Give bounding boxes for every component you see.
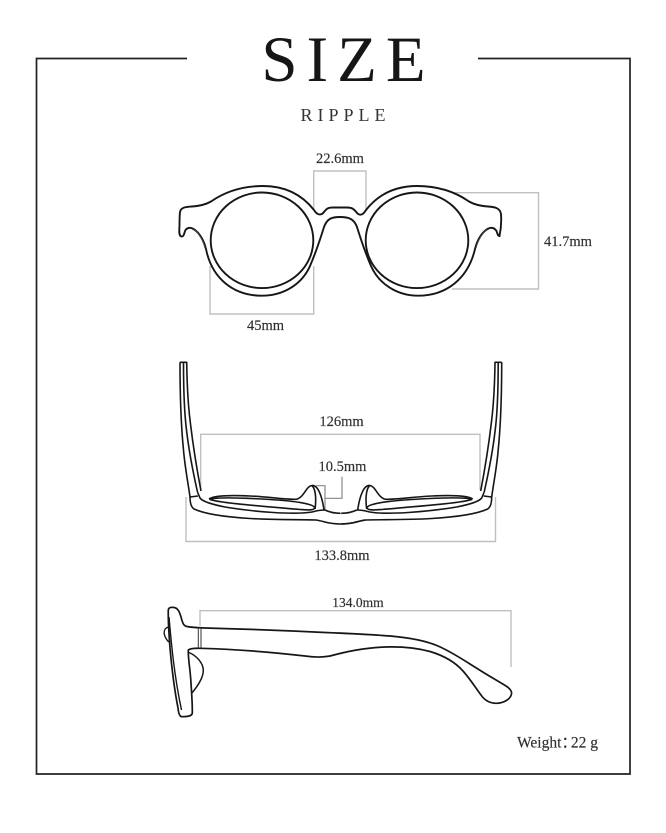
label: hinge width: 126mm bbox=[319, 414, 364, 430]
dimension lines: front view bbox=[210, 171, 538, 314]
far side nose pad bbox=[164, 627, 169, 642]
front view of glasses bbox=[179, 171, 539, 314]
subtitle: model name: RIPPLE bbox=[300, 105, 391, 125]
left half of top view bbox=[180, 362, 365, 524]
front frame outline bbox=[179, 186, 501, 296]
left lens bbox=[211, 192, 313, 288]
dimension lines: side view bbox=[200, 611, 511, 667]
side view of glasses bbox=[164, 607, 512, 717]
right lens bbox=[366, 192, 468, 288]
temple and front outline bbox=[168, 607, 512, 717]
label: lens width: 45mm bbox=[247, 318, 285, 334]
top view of glasses bbox=[180, 362, 502, 542]
lens edge line bbox=[169, 617, 182, 710]
label: nose pad width: 10.5mm bbox=[319, 459, 367, 475]
label: weight: Weight：22 g bbox=[517, 734, 598, 752]
title: SIZE bbox=[261, 24, 435, 96]
nose pad bbox=[189, 652, 203, 694]
hinge lines bbox=[198, 628, 201, 648]
label: temple length: 134.0mm bbox=[332, 595, 384, 610]
label: lens height: 41.7mm bbox=[544, 234, 593, 250]
right temple hint bbox=[476, 229, 489, 248]
dimension lines: top view bbox=[186, 434, 496, 542]
right half of top view bbox=[341, 362, 502, 524]
label: total width: 133.8mm bbox=[314, 548, 370, 564]
left temple hint bbox=[192, 229, 205, 248]
nose pad width bracket bbox=[316, 477, 342, 510]
label: bridge width: 22.6mm bbox=[316, 151, 365, 167]
panel border bbox=[36, 58, 630, 774]
